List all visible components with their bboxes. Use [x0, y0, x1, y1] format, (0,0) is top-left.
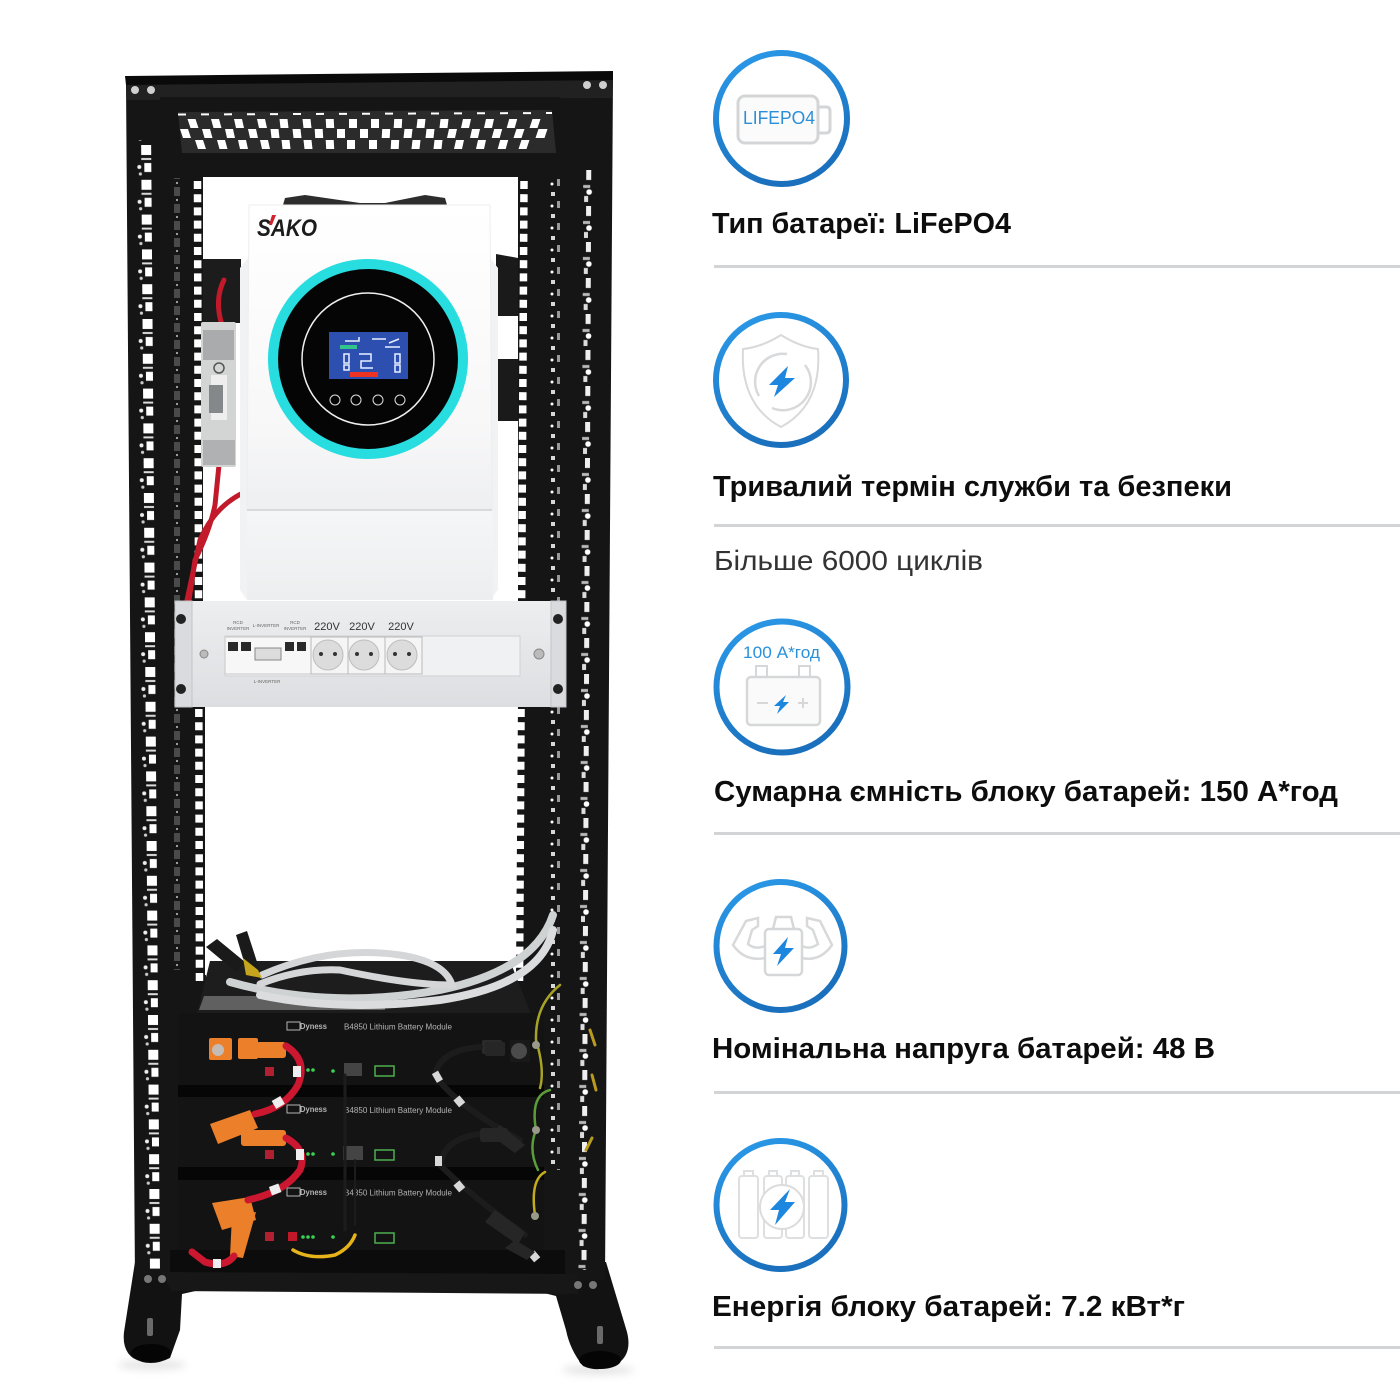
left post: [126, 82, 207, 1280]
inverter body: [247, 205, 492, 510]
panel holes: [180, 119, 548, 149]
inverter lower cover: [247, 511, 493, 600]
bottom shelf: [170, 1250, 565, 1274]
white power cables: [230, 915, 553, 1005]
module 1 labels: Dyness: [300, 1021, 327, 1031]
yellow patch cable: [293, 1235, 355, 1257]
top plate: [160, 97, 560, 178]
inverter brackets: [203, 195, 518, 421]
right post: [515, 76, 613, 1280]
inverter: [240, 205, 498, 600]
module 1 labels: B4850 Lithium Battery Module: [344, 1022, 452, 1032]
icon: 100 Ah battery: [716, 622, 848, 752]
right foot: [540, 1262, 628, 1369]
divider: [714, 1091, 1400, 1094]
module 1 labels: [287, 1021, 452, 1032]
breaker labels: L-INVERTER: [254, 679, 281, 684]
icon: shield: [716, 315, 846, 445]
right strip holes: [549, 170, 571, 1170]
heading: Тип батареї: LiFePO4: [712, 208, 1011, 240]
220V labels: 220V: [349, 621, 376, 633]
cable clamps: [206, 931, 262, 978]
heading: Номінальна напруга батарей: 48 В: [712, 1033, 1215, 1065]
black dial: [278, 269, 458, 449]
heading: Енергія блоку батарей: 7.2 кВт*г: [712, 1291, 1185, 1323]
upper opening: [203, 177, 518, 607]
right inner holes: [520, 181, 524, 985]
lower opening: [205, 700, 518, 975]
ground lugs: [531, 1041, 540, 1220]
module 2: [178, 1097, 544, 1180]
distribution panel: [175, 601, 566, 707]
DC breaker: [201, 322, 236, 467]
faceplate: [225, 636, 520, 676]
breaker labels: RCD: [290, 620, 301, 625]
module 2 indicators: [265, 1146, 394, 1160]
top beam: [125, 71, 613, 85]
module 1 dark sockets: [482, 1040, 530, 1062]
feature 5: energy: [712, 1141, 1185, 1323]
rack ears: [175, 601, 566, 707]
module 2 labels: [287, 1104, 452, 1115]
module 1 indicators: [265, 1063, 394, 1076]
panel plate: [175, 601, 565, 707]
module 3: [178, 1180, 544, 1250]
stack top cover: [197, 961, 531, 1014]
left post holes: [136, 140, 170, 1270]
right post holes: [574, 170, 606, 1270]
heading: Сумарна ємність блоку батарей: 150 А*год: [714, 776, 1338, 808]
module 3 labels: Dyness: [300, 1187, 327, 1197]
base bolts: [144, 1275, 597, 1289]
right bracket upper: [496, 254, 518, 316]
divider: [714, 265, 1400, 268]
thin ring: [302, 293, 434, 425]
seam: [247, 509, 492, 511]
220V labels: 220V: [314, 621, 341, 633]
breaker labels: INVERTER: [284, 626, 307, 631]
breaker labels: L-INVERTER: [253, 623, 280, 628]
LCD display: [329, 332, 408, 379]
panel slots: [178, 113, 552, 114]
right bracket lower: [496, 359, 518, 421]
data connectors: [480, 1042, 535, 1260]
module 3 labels: [287, 1187, 452, 1198]
panel knobs: [200, 649, 544, 659]
feature 3: capacity: [714, 622, 1338, 808]
icon: LiFePO4 battery: [716, 53, 847, 184]
sockets: [311, 637, 422, 674]
divider: [714, 832, 1400, 835]
module 2 labels: Dyness: [300, 1104, 327, 1114]
ear screws: [176, 614, 563, 694]
foot slots: [131, 1344, 621, 1369]
icon: 100 Ah battery: 100 А*год: [743, 644, 820, 662]
breaker labels: [227, 620, 307, 684]
ground wires: [532, 985, 596, 1215]
icon: LiFePO4 battery: LIFEPO4: [743, 108, 815, 128]
black data cables: [345, 1047, 525, 1235]
side flange: [240, 258, 498, 600]
SAKO logo: SAKO: [257, 215, 317, 242]
feature 4: voltage: [712, 882, 1215, 1065]
cover reflection: [199, 996, 385, 1010]
left bracket: [203, 259, 241, 323]
module 3 labels: B4850 Lithium Battery Module: [344, 1188, 452, 1198]
red battery cables: [192, 1046, 302, 1264]
left foot: [124, 1262, 200, 1363]
breakers: [225, 637, 311, 674]
red cables: [187, 280, 247, 600]
left strip holes: [172, 170, 184, 970]
top handle: [283, 195, 447, 205]
divider: [714, 524, 1400, 527]
breaker labels: INVERTER: [227, 626, 250, 631]
module 1: [178, 1013, 544, 1097]
feature 2: lifetime and safety: [713, 315, 1232, 503]
battery stack: [178, 915, 596, 1268]
cyan ring: [268, 259, 468, 459]
cable bands: [213, 1066, 304, 1268]
heading: Тривалий термін служби та безпеки: [713, 471, 1232, 503]
perforated panel: [178, 110, 556, 153]
orange connectors: [209, 1038, 286, 1258]
top band: [127, 79, 612, 100]
module 2 labels: B4850 Lithium Battery Module: [344, 1105, 452, 1115]
foot bolts: [147, 1318, 603, 1344]
breaker labels: RCD: [233, 620, 244, 625]
icon: strong battery: [716, 882, 844, 1010]
divider: [714, 1346, 1400, 1349]
220V labels: 220V: [388, 621, 415, 633]
module 3 indicators: [265, 1232, 394, 1243]
touch buttons: [330, 395, 405, 405]
feature 1: battery type: [712, 53, 1011, 240]
data cable bands: [432, 1071, 540, 1262]
icon: battery cells: [716, 1141, 844, 1269]
frame bolts: [131, 81, 607, 94]
220V labels: [314, 621, 415, 633]
rack frame: [118, 71, 634, 1375]
bottom beam: [160, 1272, 578, 1294]
floor shadow: [118, 1360, 634, 1375]
cycles text: Більше 6000 циклів: [714, 545, 983, 576]
left inner holes: [198, 181, 200, 985]
